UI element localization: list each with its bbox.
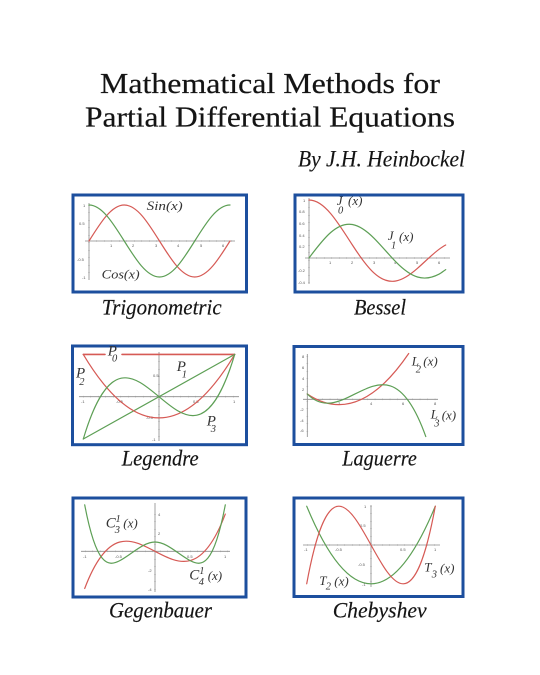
label: T3: T	[424, 560, 432, 575]
label: J0: 0	[338, 206, 344, 216]
caption: Bessel	[354, 294, 406, 319]
chart frame	[73, 195, 246, 292]
label: C3: 1	[116, 514, 121, 525]
author byline: By J.H. Heinbockel	[298, 147, 465, 172]
label: P1	[176, 359, 187, 380]
label: P0	[107, 344, 118, 364]
axes	[81, 503, 230, 592]
axes: 2	[338, 401, 341, 406]
axes: -0.2	[298, 268, 306, 273]
label: sin: Sin(x)	[147, 198, 183, 213]
axes: -0.4	[298, 280, 306, 285]
axes: 3	[155, 243, 158, 248]
axes: 1	[224, 554, 227, 559]
axes: 5	[200, 243, 203, 248]
axes: 0.2	[299, 244, 305, 249]
curve: P1	[83, 354, 235, 439]
label: J1: 1	[391, 240, 396, 252]
title: Mathematical Methods for	[100, 68, 440, 100]
label: C4: (x)	[208, 568, 222, 583]
caption: Gegenbauer	[109, 597, 212, 622]
axes: -1	[152, 437, 156, 442]
label: P2: 2	[79, 377, 85, 388]
label: J1: J	[388, 228, 395, 243]
axes	[77, 203, 235, 280]
axes: 6	[302, 365, 305, 370]
label: L3	[430, 406, 456, 430]
axes: 2	[132, 243, 135, 248]
axes: -4	[300, 418, 304, 423]
axes: 8	[302, 354, 305, 359]
caption: Chebyshev	[333, 597, 427, 622]
axes: 6	[222, 243, 225, 248]
caption: Legendre	[121, 446, 199, 471]
axes: 4	[370, 401, 373, 406]
chart frame	[295, 195, 463, 292]
label: L2: L	[411, 354, 419, 369]
axes: -0.5	[335, 547, 343, 552]
axes: 1	[329, 260, 332, 265]
label: T2: 2	[326, 582, 332, 592]
axes: 8	[434, 401, 437, 406]
label: J0: (x)	[348, 193, 362, 208]
label: L2: 2	[416, 364, 422, 376]
curve: C4	[85, 505, 225, 563]
label: C3: 3	[114, 525, 120, 536]
chart frame	[294, 346, 463, 444]
curve: L2	[307, 354, 409, 405]
axes: 1	[434, 547, 437, 552]
label: J1: (x)	[399, 229, 413, 244]
axes	[79, 352, 239, 442]
axes	[303, 504, 440, 587]
label: P2	[75, 366, 85, 388]
curve: sin	[89, 205, 230, 277]
title: Partial Differential Equations	[85, 102, 455, 134]
axes: 0.5	[400, 547, 406, 552]
label: P3	[206, 414, 216, 435]
label: L2: (x)	[423, 354, 438, 369]
curve: P0	[83, 353, 235, 355]
label: P2: P	[75, 366, 85, 382]
axes: 0.8	[299, 209, 305, 214]
axes: -0.5	[77, 257, 85, 262]
axes: -1	[81, 399, 85, 404]
curve: J1	[309, 224, 446, 278]
label: P1: 1	[182, 369, 187, 380]
axes: 5	[416, 260, 419, 265]
curve: L3	[307, 385, 426, 437]
axes: 1	[83, 203, 86, 208]
axes: -6	[300, 428, 304, 433]
caption: Trigonometric	[102, 294, 222, 319]
axes	[298, 198, 450, 285]
axes: -0.5	[146, 415, 154, 420]
panel: bessel	[295, 193, 463, 319]
axes: 6	[402, 401, 405, 406]
axes: -1	[304, 547, 308, 552]
axes: 0.6	[299, 221, 305, 226]
curve: P3	[83, 354, 235, 439]
axes: -2	[300, 407, 304, 412]
label: T2	[319, 573, 349, 592]
axes: 0.4	[299, 233, 305, 238]
label: P1: P	[176, 359, 186, 375]
label: C3	[106, 514, 138, 536]
axes: 1	[364, 504, 367, 509]
curve: T3	[307, 506, 435, 584]
axes: -0.5	[358, 562, 366, 567]
caption: Laguerre	[341, 446, 417, 471]
axes: 4	[302, 376, 305, 381]
label: P0: 0	[112, 354, 118, 364]
curve: P2	[83, 354, 235, 418]
panel: trigonometric	[73, 195, 246, 319]
label: J1	[388, 228, 413, 252]
label: L2	[411, 354, 438, 376]
label: P0: P	[107, 344, 117, 360]
panel: legendre	[72, 344, 246, 471]
axes: 6	[438, 260, 441, 265]
curve: T2	[307, 506, 435, 584]
label: C4: C	[189, 567, 200, 583]
curve: cos	[89, 205, 230, 277]
label: T2: (x)	[334, 574, 349, 589]
axes: -0.5	[116, 399, 124, 404]
axes: 4	[394, 260, 397, 265]
label: T3	[424, 560, 454, 581]
chart frame	[294, 498, 463, 596]
label: L3: (x)	[442, 407, 456, 422]
label: L3: 3	[433, 419, 440, 430]
axes: 2	[158, 531, 161, 536]
panel: chebyshev	[294, 498, 463, 622]
label: P3: P	[206, 414, 216, 430]
label: J0	[337, 193, 362, 216]
axes: 1	[233, 399, 236, 404]
axes: 3	[373, 260, 376, 265]
axes: 4	[158, 512, 161, 517]
label: C3: (x)	[123, 515, 138, 530]
axes: 2	[351, 260, 354, 265]
axes: 0.5	[79, 221, 85, 226]
axes: 0.5	[187, 554, 193, 559]
axes: -0.5	[115, 554, 123, 559]
axes: -2	[148, 568, 152, 573]
axes: -1	[83, 554, 87, 559]
axes: 0.5	[360, 523, 366, 528]
label: C4	[189, 566, 222, 588]
axes: 0.5	[193, 399, 199, 404]
chart frame	[72, 346, 246, 445]
label: T2: T	[319, 573, 327, 588]
label: J0: J	[337, 193, 344, 208]
axes: 2	[302, 387, 305, 392]
curve: C3	[85, 514, 225, 588]
axes	[300, 354, 438, 437]
label: T3: (x)	[440, 560, 454, 575]
axes: -4	[148, 587, 152, 592]
axes: 1	[110, 243, 113, 248]
axes: 0.5	[153, 373, 159, 378]
axes: -1	[362, 582, 366, 587]
title	[85, 68, 455, 134]
panel: gegenbauer	[73, 498, 246, 622]
label: C4: 4	[199, 577, 205, 588]
curve: J0	[309, 200, 446, 281]
panel: laguerre	[294, 346, 463, 471]
label: T3: 3	[431, 570, 437, 581]
chart frame	[73, 498, 246, 597]
label: C3: C	[106, 515, 117, 531]
label: C4: 1	[199, 566, 205, 577]
label: L3: L	[430, 406, 438, 421]
axes: -1	[82, 275, 86, 280]
label: cos: Cos(x)	[102, 266, 140, 281]
label: P3: 3	[210, 424, 216, 435]
axes: 1	[303, 198, 306, 203]
axes: 4	[177, 243, 180, 248]
